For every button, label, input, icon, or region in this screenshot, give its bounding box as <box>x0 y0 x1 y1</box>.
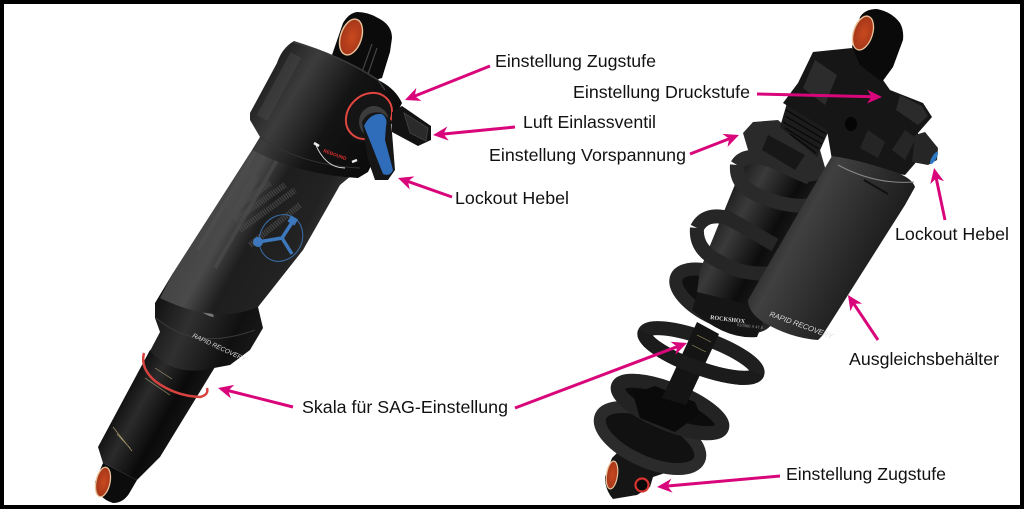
label: Luft Einlassventil: Luft Einlassventil <box>523 112 656 132</box>
lower rod and eye <box>93 350 215 503</box>
middle spring coil back <box>639 318 763 388</box>
arrow: Ausgleichsbehälter <box>852 302 878 340</box>
sag o-ring <box>143 353 207 397</box>
piggyback reservoir: RAPID RECOVERY <box>768 309 835 341</box>
upper spring coil with seat: 610360 X 47.5 <box>737 322 764 330</box>
piggyback reservoir <box>748 156 915 341</box>
bottom mount with rebound adjuster <box>605 448 668 499</box>
upper cap: REBOUND <box>322 148 348 162</box>
damper body <box>697 130 825 310</box>
piston rod <box>662 322 719 405</box>
blue lockout lever <box>362 112 395 180</box>
lower flare collar: RAPID RECOVERY <box>191 332 247 364</box>
blue logo <box>235 183 311 269</box>
top mounting eye <box>332 12 392 82</box>
main air can <box>160 140 358 314</box>
bottom spring coil with dark seat <box>591 394 709 482</box>
third spring coil <box>737 157 812 206</box>
upper mount, compression head and eye <box>783 9 932 175</box>
arrow: Einstellung Druckstufe <box>757 94 874 97</box>
label: Einstellung Zugstufe bottom: Einstellung Zugstufe <box>786 464 946 484</box>
lower flare collar <box>150 273 264 371</box>
middle spring coil front <box>644 332 757 378</box>
left air shock <box>93 12 431 503</box>
rebound dial with red ring <box>336 83 402 151</box>
arrow: Skala to left shock <box>226 390 293 407</box>
label: Einstellung Vorspannung: Einstellung Vorspannung <box>489 145 686 165</box>
top spring retainer <box>743 120 828 182</box>
arrow: Lockout Hebel, right shock <box>936 176 945 220</box>
arrow: Einstellung Vorspannung <box>690 138 732 154</box>
second spring coil <box>697 216 785 274</box>
air valve <box>392 106 431 146</box>
threaded preload section <box>780 103 830 157</box>
upper cap <box>250 41 402 178</box>
lockout knob <box>912 132 939 165</box>
label: Ausgleichsbehälter: Ausgleichsbehälter <box>849 349 999 369</box>
arrow: Einstellung Zugstufe, left shock <box>412 66 490 97</box>
label: Skala für SAG-Einstellung: Skala für SAG-Einstellung <box>302 397 508 417</box>
upper spring coil with seat: ROCKSHOX <box>710 315 746 325</box>
upper spring coil with seat <box>667 257 777 339</box>
right coil shock <box>591 9 939 499</box>
arrow: Einstellung Zugstufe, right shock <box>665 476 780 486</box>
label: Lockout Hebel left: Lockout Hebel <box>455 188 569 208</box>
arrow: Luft Einlassventil <box>441 127 515 134</box>
arrow: Skala to right shock <box>515 346 680 408</box>
lower spring coil and cone <box>612 370 728 444</box>
label: Einstellung Druckstufe: Einstellung Druckstufe <box>573 82 750 102</box>
arrow: Lockout Hebel, left shock <box>406 181 452 197</box>
label: Lockout Hebel right: Lockout Hebel <box>895 224 1009 244</box>
label: Einstellung Zugstufe: Einstellung Zugstufe <box>495 51 656 71</box>
